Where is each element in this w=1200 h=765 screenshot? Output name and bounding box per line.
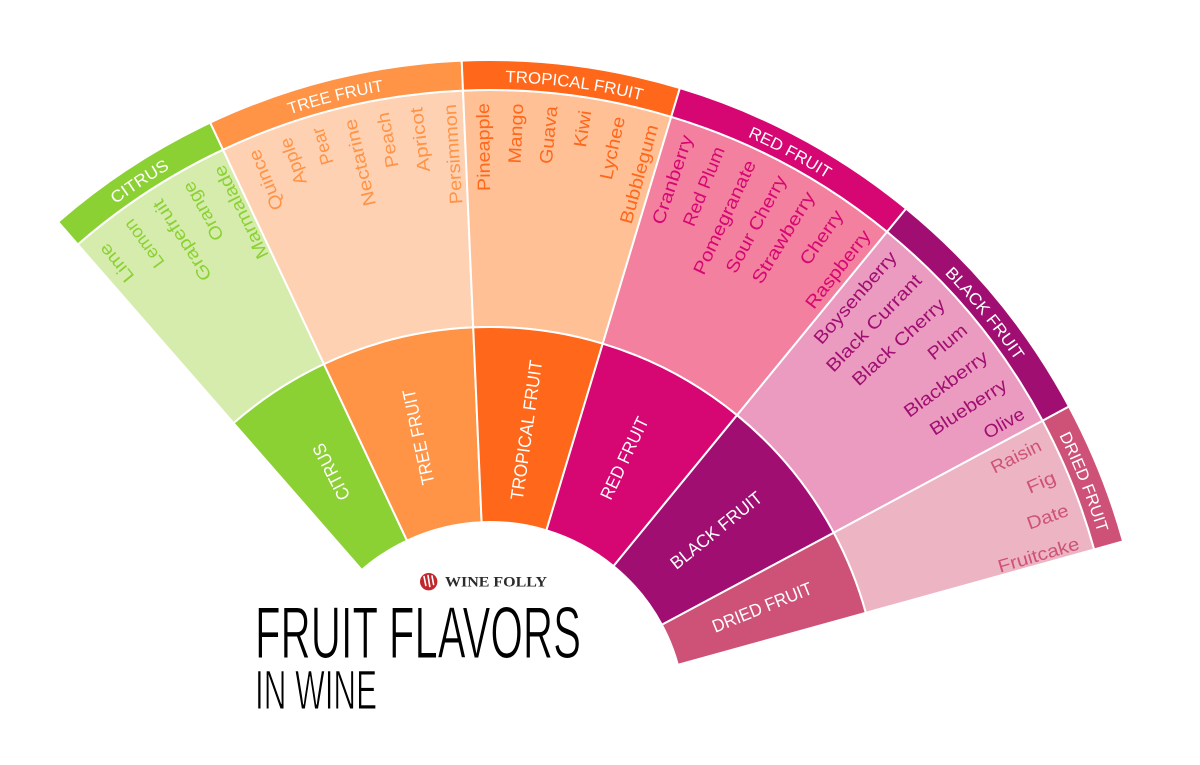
- tropical fruit flavors list: Mango: [505, 103, 527, 164]
- citrus flavors list: Orange: [178, 178, 228, 244]
- black fruit flavors list: Olive: [980, 404, 1028, 443]
- inner ring labels: TREE FRUIT: [399, 387, 438, 486]
- panel: dried fruit: [662, 406, 1122, 664]
- dried fruit flavors list: Raisin: [987, 435, 1045, 477]
- tree fruit flavor wedge: [223, 91, 473, 364]
- title: [255, 593, 581, 721]
- black fruit flavors list: Boysenberry: [810, 247, 901, 348]
- dried fruit flavors list: Fig: [1023, 467, 1059, 498]
- flavor wheel: [60, 61, 1122, 664]
- citrus outer band: [60, 124, 222, 244]
- panel: black fruit: [613, 208, 1068, 624]
- inner ring labels: DRIED FRUIT: [709, 578, 815, 637]
- red fruit outer band: [670, 88, 905, 232]
- icon: wine folly badge: [420, 573, 437, 590]
- tropical fruit flavors list: Lychee: [596, 115, 629, 181]
- red fruit flavors list: Sour Cherry: [722, 172, 790, 276]
- red fruit flavors list: Raspberry: [801, 226, 875, 313]
- red fruit flavors list: Cherry: [796, 206, 847, 269]
- red fruit flavors list: Strawberry: [748, 188, 819, 287]
- dried fruit flavors list: Date: [1024, 500, 1071, 533]
- tropical fruit flavors list: Pineapple: [473, 103, 494, 191]
- black fruit flavors list: Blueberry: [926, 375, 1011, 439]
- tropical fruit flavors list: [473, 103, 662, 226]
- logo: wine folly: [420, 573, 547, 591]
- red fruit flavors list: Red Plum: [679, 144, 729, 229]
- tree fruit flavors list: Apricot: [406, 106, 434, 173]
- citrus outer band: CITRUS: [112, 160, 168, 202]
- tree fruit flavors list: Persimmon: [440, 104, 466, 205]
- black fruit flavors list: Black Currant: [822, 270, 926, 376]
- tree fruit outer band: TREE FRUIT: [286, 80, 382, 114]
- dried fruit outer band: [1042, 406, 1122, 548]
- black fruit flavors list: Black Cherry: [848, 294, 949, 390]
- inner ring labels: RED FRUIT: [596, 414, 653, 503]
- dried fruit inner wedge: [662, 533, 866, 665]
- black fruit outer band: [887, 208, 1068, 420]
- black fruit outer band: BLACK FRUIT: [946, 266, 1025, 358]
- citrus flavors list: Lime: [95, 240, 138, 286]
- citrus flavors list: Marmalade: [209, 162, 273, 262]
- inner ring labels: CITRUS: [309, 440, 354, 503]
- tree fruit flavors list: Peach: [373, 111, 402, 169]
- tropical fruit flavors list: Guava: [536, 104, 562, 165]
- title: FRUIT FLAVORS: [255, 593, 581, 674]
- tropical fruit outer band: TROPICAL FRUIT: [506, 70, 644, 100]
- tree fruit flavors list: Nectarine: [340, 117, 380, 208]
- black fruit flavors list: Plum: [924, 320, 971, 364]
- citrus flavors list: [95, 162, 273, 286]
- black fruit flavors list: [810, 247, 1028, 443]
- citrus flavors list: Grapefruit: [149, 196, 216, 285]
- logo wordmark: WINE FOLLY: [445, 575, 547, 591]
- citrus flavors list: Lemon: [120, 215, 168, 272]
- panel: red fruit: [546, 88, 905, 565]
- black fruit flavors list: Blackberry: [900, 347, 992, 421]
- tree fruit flavors list: [244, 104, 466, 213]
- citrus inner wedge: [234, 364, 407, 570]
- panel: tropical fruit: [460, 61, 679, 529]
- panel: citrus: [60, 124, 406, 569]
- red fruit flavors list: Pomegranate: [689, 157, 760, 278]
- red fruit flavors list: [648, 132, 875, 313]
- tree fruit outer band: [210, 62, 462, 150]
- tropical fruit flavors list: Kiwi: [570, 109, 595, 149]
- red fruit flavor wedge: [603, 117, 887, 415]
- dried fruit flavor wedge: [834, 421, 1094, 613]
- tree fruit inner wedge: [324, 327, 482, 541]
- inner ring labels: [309, 359, 815, 637]
- inner ring labels: TROPICAL FRUIT: [507, 359, 546, 501]
- tropical fruit flavor wedge: [463, 90, 671, 344]
- tropical fruit flavors list: Bubblegum: [616, 122, 662, 226]
- red fruit outer band: RED FRUIT: [748, 126, 833, 176]
- dried fruit outer band: DRIED FRUIT: [1060, 432, 1108, 530]
- citrus flavor wedge: [78, 150, 324, 423]
- tropical fruit inner wedge: [473, 327, 603, 530]
- tree fruit flavors list: Quince: [244, 147, 287, 213]
- tropical fruit outer band: [460, 61, 679, 118]
- black fruit flavor wedge: [737, 232, 1043, 533]
- tree fruit flavors list: Apple: [276, 135, 311, 188]
- red fruit flavors list: Cranberry: [648, 132, 697, 227]
- title: IN WINE: [255, 658, 377, 721]
- red fruit inner wedge: [546, 344, 737, 566]
- tree fruit flavors list: Pear: [308, 125, 337, 167]
- inner ring labels: BLACK FRUIT: [666, 488, 766, 573]
- dried fruit flavors list: [987, 435, 1082, 577]
- dried fruit flavors list: Fruitcake: [995, 534, 1082, 577]
- black fruit inner wedge: [614, 415, 834, 625]
- panel: tree fruit: [210, 62, 480, 540]
